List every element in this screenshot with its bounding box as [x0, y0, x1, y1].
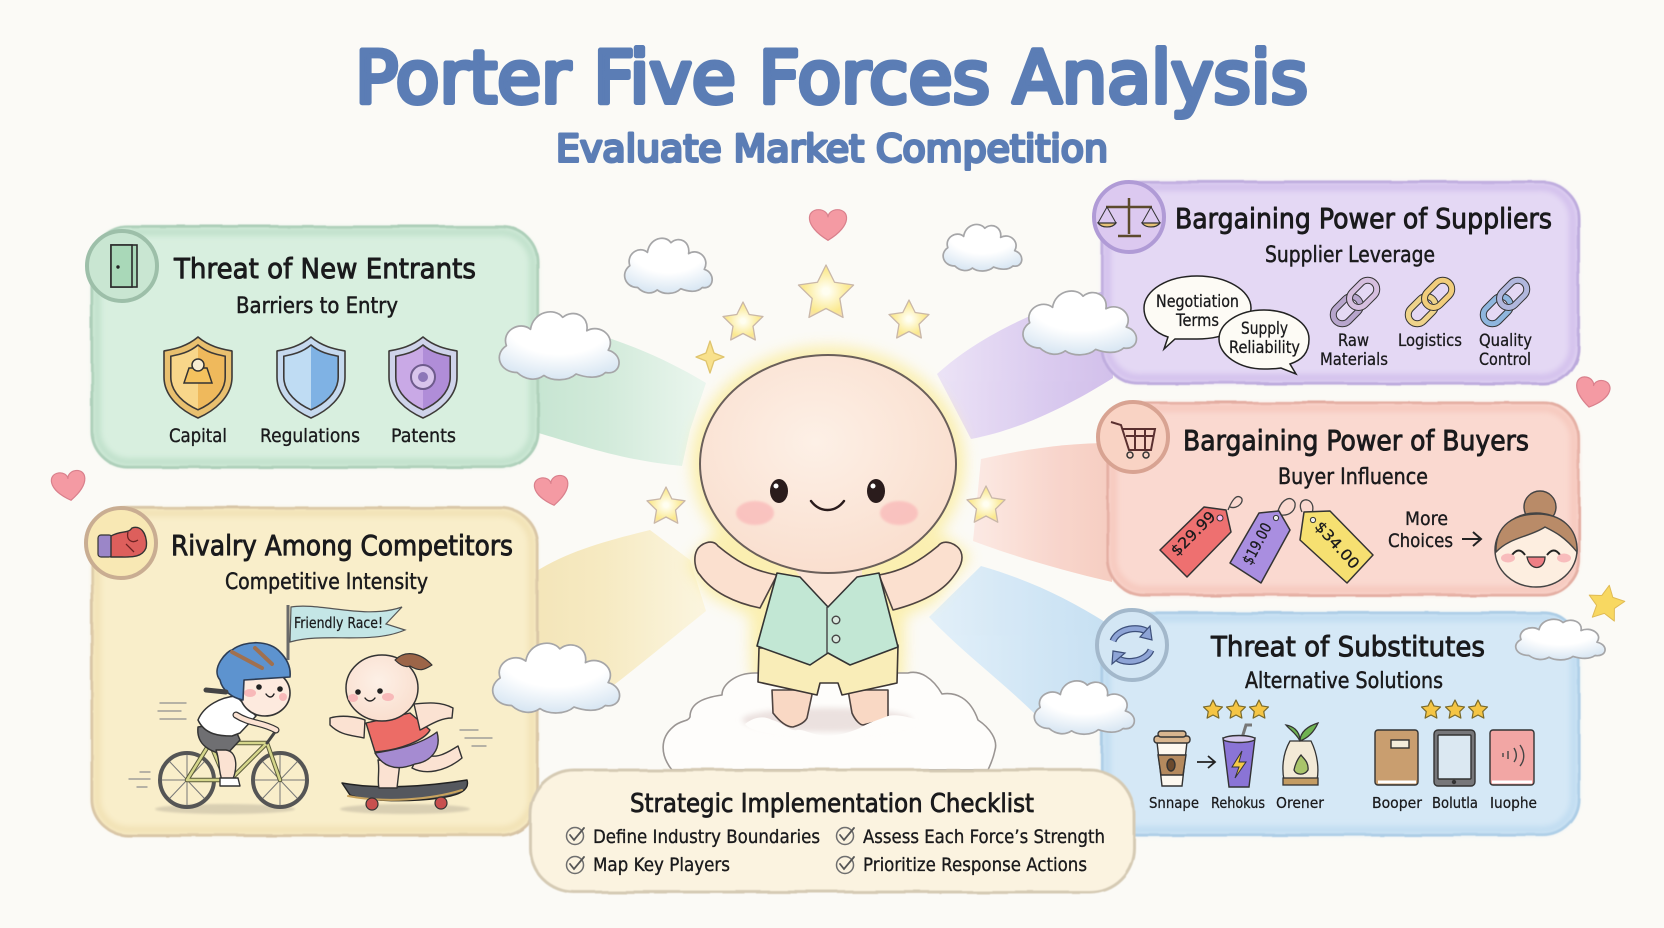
- title: Porter Five Forces Analysis: [355, 36, 1308, 120]
- heading: Threat of Substitutes: [1210, 630, 1485, 663]
- flag: [288, 605, 405, 660]
- item labels: Snnape: [1149, 794, 1199, 812]
- check item: Assess Each Force’s Strength: [863, 826, 1105, 848]
- clouds: [493, 224, 1605, 734]
- speech bubble: supply reliability: Reliability: [1229, 338, 1300, 358]
- labels: Logistics: [1398, 331, 1462, 351]
- price tag: $19.00: [1230, 499, 1295, 583]
- panel: bargaining power of buyers: [1098, 402, 1579, 595]
- labels: [1320, 331, 1532, 370]
- label: Patents: [391, 425, 456, 447]
- heading: Bargaining Power of Suppliers: [1175, 202, 1552, 235]
- label: Regulations: [260, 425, 360, 447]
- speech bubble: supply reliability: [1219, 310, 1309, 374]
- cloud shadow: [742, 708, 912, 732]
- heading: Bargaining Power of Buyers: [1183, 424, 1529, 457]
- flag: Friendly Race!: [294, 614, 383, 632]
- band: suppliers: [937, 290, 1113, 439]
- item labels: Orener: [1276, 794, 1325, 812]
- central character: [647, 265, 1005, 770]
- band: substitutes: [929, 566, 1105, 715]
- item labels: Iuophe: [1490, 794, 1537, 812]
- check item: Define Industry Boundaries: [593, 826, 820, 848]
- chain: raw materials: [1330, 277, 1380, 327]
- heart: middle left: [533, 474, 571, 508]
- price tag: $29.99: $29.99: [1167, 508, 1219, 560]
- icon: audiobook: [1490, 730, 1534, 785]
- cloud: yellow band: [493, 643, 620, 713]
- icon: scales: [1094, 182, 1164, 252]
- subheading: Alternative Solutions: [1245, 669, 1443, 694]
- icon: energy drink: [1223, 725, 1255, 787]
- arms: [695, 542, 777, 608]
- arrow: [1462, 532, 1481, 546]
- more choices text: [1388, 508, 1453, 552]
- icon: book: [1375, 730, 1418, 785]
- band: new entrants: [535, 320, 706, 466]
- face: [736, 479, 918, 525]
- speech bubble: negotiation terms: [1144, 276, 1251, 349]
- heading: Rivalry Among Competitors: [171, 529, 513, 562]
- speech bubble: negotiation terms: Terms: [1175, 311, 1219, 331]
- arrow: [1197, 756, 1215, 768]
- shield: capital: [164, 337, 232, 418]
- heart: left: [50, 469, 88, 503]
- skater: [330, 654, 492, 814]
- stars around head: [647, 265, 1005, 523]
- cloud tufts at feet: [745, 715, 918, 738]
- label: Capital: [169, 425, 227, 447]
- stars: first rating: [1203, 700, 1269, 718]
- item labels: Booper: [1372, 794, 1423, 812]
- labels: Raw: [1338, 331, 1369, 351]
- star: right corner: [1586, 582, 1627, 622]
- vest: [757, 573, 898, 665]
- item labels: [1149, 794, 1537, 812]
- panel: bargaining power of suppliers: [1094, 182, 1578, 383]
- price tag: $34.00: $34.00: [1311, 518, 1363, 573]
- more choices text: More: [1405, 508, 1448, 530]
- check item: Prioritize Response Actions: [863, 854, 1087, 876]
- neck: [795, 570, 862, 612]
- item labels: Rehokus: [1211, 794, 1265, 812]
- legs: [772, 690, 813, 727]
- cloud: top right: [943, 224, 1022, 271]
- price tag: $19.00: $19.00: [1239, 520, 1276, 568]
- subheading: Supplier Leverage: [1265, 243, 1435, 268]
- labels: Materials: [1320, 350, 1388, 370]
- cloud: top left: [625, 238, 712, 293]
- more choices text: Choices: [1388, 530, 1453, 552]
- band: buyers: [973, 443, 1112, 582]
- shield: regulations: [277, 337, 345, 418]
- shorts: [758, 645, 898, 695]
- icon: happy girl: [1495, 491, 1577, 587]
- cloud: substitutes corner: [1516, 619, 1605, 660]
- cloud: green band: [499, 312, 619, 380]
- check item: Map Key Players: [593, 854, 730, 876]
- icon: tea sapling bag: [1283, 723, 1318, 785]
- labels: Control: [1479, 350, 1531, 370]
- panel: strategic implementation checklist: [530, 770, 1134, 892]
- cloud base: [663, 672, 996, 770]
- icon: tablet: [1434, 730, 1475, 786]
- icon: substitution arrows: [1097, 610, 1167, 680]
- item labels: Bolutla: [1432, 794, 1478, 812]
- band: rivalry: [535, 530, 706, 700]
- heading: Strategic Implementation Checklist: [630, 789, 1034, 819]
- price tag: $34.00: [1300, 500, 1373, 583]
- icon: boxing glove: [86, 508, 156, 578]
- cloud: blue band: [1034, 681, 1134, 734]
- icon: coffee cup: [1154, 731, 1190, 786]
- glow: [695, 353, 962, 680]
- cloud: purple band: [1023, 291, 1136, 355]
- subtitle: Evaluate Market Competition: [556, 128, 1108, 170]
- subheading: Competitive Intensity: [225, 570, 428, 595]
- speech bubble: supply reliability: Supply: [1241, 319, 1288, 339]
- panel: rivalry among competitors: [86, 508, 537, 835]
- subheading: Barriers to Entry: [236, 294, 398, 319]
- labels: Quality: [1479, 331, 1532, 351]
- speech bubble: negotiation terms: Negotiation: [1156, 292, 1239, 312]
- head: [700, 355, 956, 573]
- panel: threat of new entrants: [87, 227, 538, 467]
- cyclist: [129, 643, 307, 814]
- icon: door: [87, 231, 157, 301]
- chain: quality control: [1480, 277, 1530, 327]
- heading: Threat of New Entrants: [173, 252, 476, 285]
- stars: second rating: [1421, 700, 1488, 718]
- heart: top: [809, 210, 847, 240]
- chain: logistics: [1405, 277, 1455, 327]
- panel: threat of substitutes: [1097, 610, 1579, 835]
- icon: shopping cart: [1098, 402, 1168, 472]
- heart: right: [1573, 375, 1611, 411]
- price tag: $29.99: [1160, 497, 1242, 577]
- shield: patents: [389, 337, 457, 418]
- subheading: Buyer Influence: [1278, 465, 1428, 490]
- connector bands: [535, 290, 1113, 715]
- hearts: [50, 210, 1611, 508]
